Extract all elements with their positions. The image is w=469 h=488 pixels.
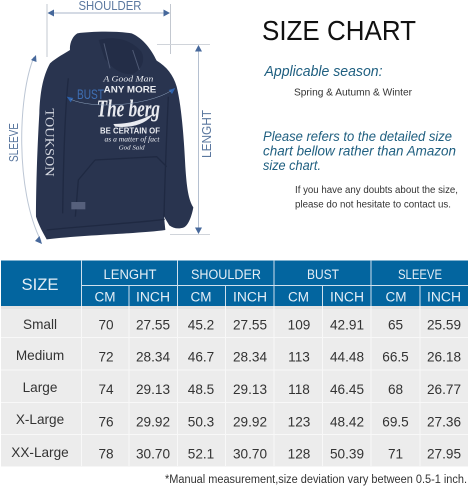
table header: SIZE bbox=[22, 275, 58, 294]
row: Large: 26.77 bbox=[427, 382, 461, 397]
row: Small: 25.59 bbox=[427, 318, 461, 332]
row: X-Large: 48.42 bbox=[330, 414, 364, 430]
table header: CM bbox=[288, 290, 309, 304]
row: Small: 65 bbox=[388, 318, 403, 332]
table header: BUST bbox=[307, 267, 339, 282]
row: Medium: 28.34 bbox=[136, 350, 170, 364]
row: Small: 27.55 bbox=[136, 318, 170, 332]
chest print text: ANY MORE bbox=[104, 84, 156, 94]
row: XX-Large: 27.95 bbox=[427, 446, 461, 462]
chest print text bbox=[97, 74, 161, 152]
table header: CM bbox=[386, 290, 406, 304]
size chart notice: chart bellow rather than Amazon bbox=[263, 144, 456, 158]
chest print text: A Good Man bbox=[102, 74, 153, 83]
row: Small: 42.91 bbox=[330, 318, 364, 332]
size chart notice bbox=[263, 129, 456, 173]
table header: SHOULDER bbox=[191, 267, 261, 282]
row: X-Large: X-Large bbox=[16, 412, 64, 427]
row: X-Large: 50.3 bbox=[188, 414, 214, 430]
row: Small: 27.55 bbox=[233, 318, 267, 332]
shoulder measurement bbox=[47, 0, 170, 57]
row: Small: Small bbox=[23, 317, 57, 332]
chest print text: God Said bbox=[119, 146, 145, 152]
contact note: If you have any doubts about the size, bbox=[295, 185, 458, 196]
title: SIZE CHART bbox=[262, 15, 416, 46]
hoodie illustration bbox=[36, 32, 193, 239]
row: XX-Large: 30.70 bbox=[233, 446, 267, 462]
contact note: please do not hesitate to contact us. bbox=[295, 200, 451, 210]
applicable season heading: Applicable season: bbox=[264, 64, 382, 80]
contact note bbox=[295, 185, 458, 210]
sleeve measurement: SLEEVE bbox=[6, 123, 21, 162]
row: Small: 70 bbox=[98, 318, 114, 332]
row: X-Large: 69.5 bbox=[382, 414, 409, 430]
table header: INCH bbox=[233, 290, 267, 304]
table body background bbox=[1, 306, 468, 466]
drawstrings bbox=[104, 43, 139, 70]
hoodie body bbox=[36, 32, 193, 239]
row: X-Large bbox=[16, 412, 461, 430]
table header: CM bbox=[190, 290, 212, 304]
sleeve seams bbox=[47, 78, 168, 230]
row: Large: 68 bbox=[388, 382, 403, 397]
chest print text: The berg bbox=[97, 96, 160, 123]
table header bbox=[1, 260, 468, 306]
table header: CM bbox=[94, 290, 116, 304]
table header: INCH bbox=[330, 290, 364, 304]
row: Large: 29.13 bbox=[233, 382, 267, 397]
row: XX-Large: 71 bbox=[388, 446, 403, 462]
length measurement: LENGHT bbox=[199, 110, 214, 158]
row: XX-Large: 50.39 bbox=[330, 446, 364, 462]
row: X-Large: 27.36 bbox=[427, 414, 461, 430]
row: X-Large: 29.92 bbox=[233, 414, 267, 430]
row: Medium: 72 bbox=[98, 350, 114, 364]
season list: Spring & Autumn & Winter bbox=[294, 88, 413, 98]
table header: LENGHT bbox=[104, 267, 156, 282]
table header: SLEEVE bbox=[398, 267, 442, 282]
hood opening bbox=[99, 38, 143, 74]
row: XX-Large: 128 bbox=[288, 446, 310, 462]
row: Large: 48.5 bbox=[188, 382, 214, 397]
row: Medium: 26.18 bbox=[427, 350, 461, 364]
row: Medium: 113 bbox=[288, 350, 310, 364]
table header: INCH bbox=[427, 290, 461, 304]
size chart notice: size chart. bbox=[263, 158, 321, 173]
row: Small bbox=[23, 317, 461, 332]
row: Small: 109 bbox=[288, 318, 310, 332]
sleeve measurement bbox=[6, 55, 42, 244]
size table bbox=[1, 260, 468, 466]
row: XX-Large: XX-Large bbox=[11, 445, 69, 460]
row: X-Large: 76 bbox=[98, 414, 114, 430]
row: X-Large: 123 bbox=[288, 414, 310, 430]
row: XX-Large bbox=[11, 445, 461, 462]
row: Large: 118 bbox=[288, 382, 310, 397]
row: Medium: Medium bbox=[16, 348, 64, 363]
row: Large bbox=[23, 380, 461, 397]
row: X-Large: 29.92 bbox=[136, 414, 170, 430]
sleeve brand text: TOUKSON bbox=[42, 108, 56, 177]
row: Medium: 44.48 bbox=[330, 350, 364, 364]
row: XX-Large: 52.1 bbox=[188, 446, 214, 462]
table header: INCH bbox=[136, 290, 170, 304]
row: Small: 45.2 bbox=[188, 318, 214, 332]
row: XX-Large: 30.70 bbox=[136, 446, 170, 462]
chest print text: BE CERTAIN OF bbox=[100, 125, 160, 135]
row: Large: 29.13 bbox=[136, 382, 170, 397]
row: Medium: 28.34 bbox=[233, 350, 267, 364]
row: Large: Large bbox=[23, 380, 57, 395]
row: Medium bbox=[16, 348, 461, 364]
bust measure line bbox=[67, 88, 175, 102]
chest print text: as a matter of fact bbox=[104, 136, 161, 144]
row: Medium: 46.7 bbox=[188, 350, 214, 364]
length measurement bbox=[157, 44, 214, 234]
row: XX-Large: 78 bbox=[98, 446, 114, 462]
row: Large: 46.45 bbox=[330, 382, 364, 397]
row: Medium: 66.5 bbox=[382, 350, 409, 364]
row: Large: 74 bbox=[98, 382, 114, 397]
size chart notice: Please refers to the detailed size bbox=[263, 129, 452, 144]
sleeve label patch bbox=[71, 202, 85, 209]
bust label: BUST bbox=[77, 87, 104, 102]
